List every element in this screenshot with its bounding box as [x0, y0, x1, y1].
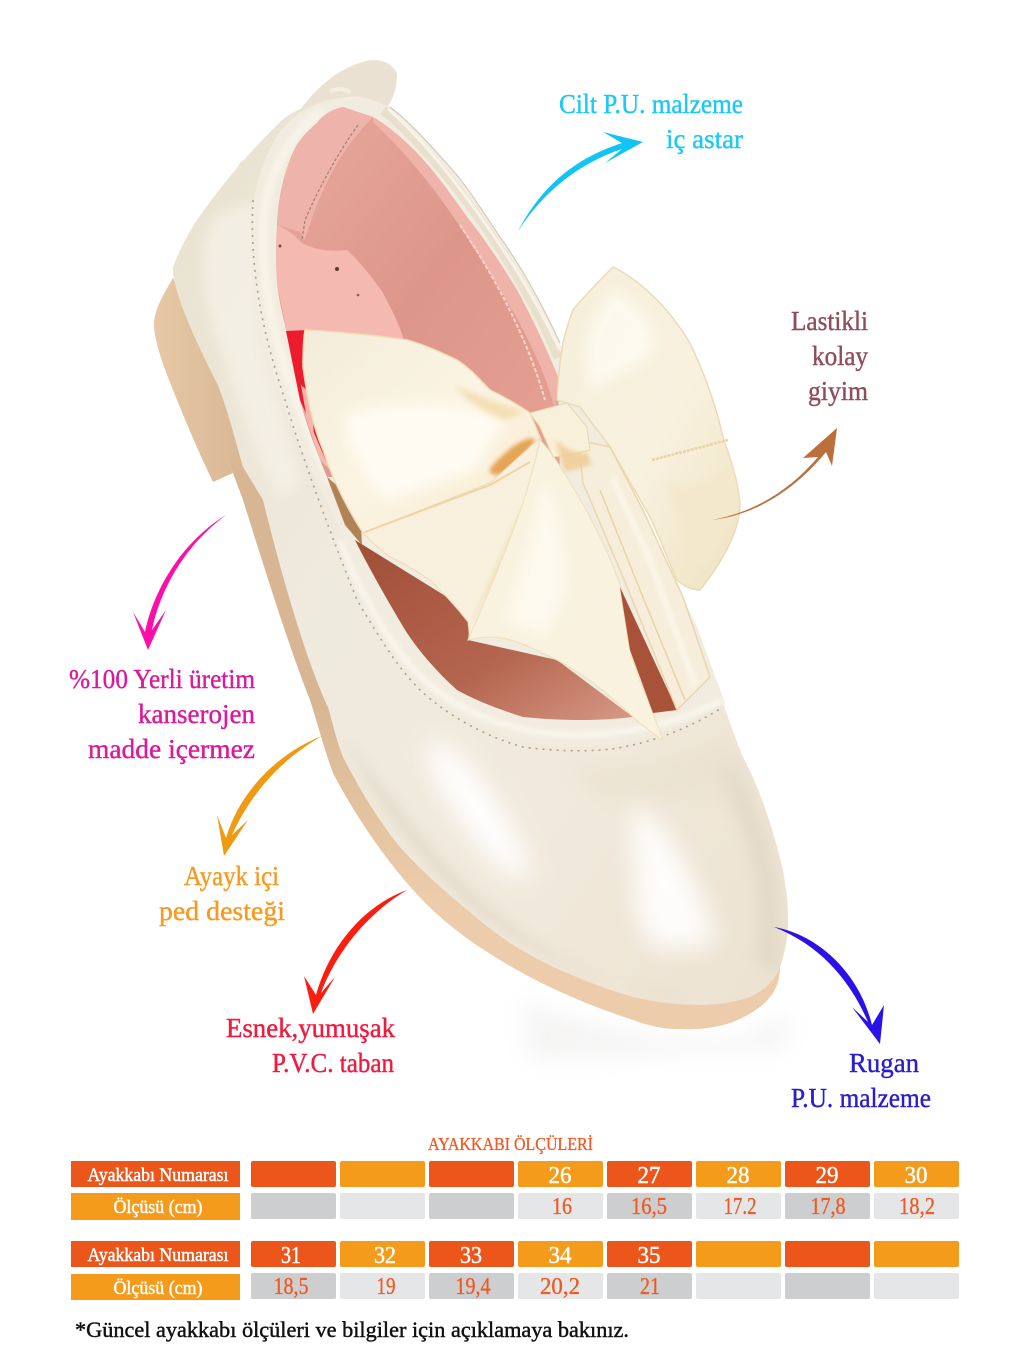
collar piping	[252, 97, 725, 746]
row labels: Ölçüsü (cm)	[114, 1197, 202, 1218]
shoe sizes: 26	[548, 1163, 572, 1189]
insole	[277, 225, 410, 480]
text: lining: Cilt P.U. malzeme	[559, 89, 743, 119]
arrow: orange to insole label	[217, 736, 322, 856]
red insole label	[286, 330, 345, 510]
shoe sizes: 32	[374, 1243, 396, 1269]
text: lining: iç astar	[666, 124, 743, 154]
lower opening	[355, 540, 633, 720]
foot lengths	[274, 1194, 935, 1300]
rim outer edge line	[390, 107, 560, 343]
bow knot	[530, 403, 590, 457]
arrow: magenta to origin label	[133, 515, 226, 650]
pearl highlights on toe	[203, 200, 781, 1003]
arrow: blue to patent label	[774, 927, 884, 1044]
text: elastic: giyim	[808, 376, 868, 406]
text: sole: P.V.C. taban	[272, 1048, 394, 1078]
foot lengths: 18,2	[899, 1194, 935, 1220]
foot lengths: 16,5	[631, 1194, 667, 1220]
text: patent: P.U. malzeme	[791, 1083, 931, 1113]
right lobe	[557, 267, 740, 590]
size table	[71, 1161, 959, 1300]
bow inner shadow	[490, 438, 536, 475]
foot lengths: 19	[376, 1274, 396, 1300]
text: origin: kanserojen	[138, 699, 255, 729]
heel tab	[228, 60, 397, 185]
foot lengths: 19,4	[456, 1274, 490, 1300]
text: insole	[159, 861, 285, 926]
row labels: Ayakkabı Numarası	[88, 1246, 228, 1266]
lining edge band	[373, 117, 558, 410]
foot lengths: 17.2	[724, 1194, 756, 1220]
hanging ribbon tail	[578, 440, 710, 710]
text: sole	[226, 1013, 395, 1078]
foot lengths: 18,5	[274, 1274, 308, 1300]
text: patent: Rugan	[849, 1048, 919, 1078]
text: origin: madde içermez	[88, 734, 255, 764]
footnote: *Güncel ayakkabı ölçüleri ve bilgiler için açıklamaya bakınız.	[75, 1317, 629, 1342]
shoe sizes: 31	[281, 1243, 301, 1269]
foot lengths: 16	[552, 1194, 572, 1220]
text: insole: Ayayk içi	[184, 861, 279, 891]
left lobe	[303, 330, 541, 533]
inner side panel	[278, 107, 373, 240]
arrow: cyan to lining label	[518, 132, 643, 231]
text: lining	[559, 89, 743, 154]
satin bow	[303, 267, 740, 740]
arrow: brown to elastic label	[712, 428, 837, 520]
floor shadow	[520, 1000, 790, 1060]
text: elastic	[791, 306, 868, 406]
shoe sizes: 35	[638, 1243, 660, 1269]
rim highlight	[383, 110, 558, 358]
table heading: AYAKKABI ÖLÇÜLERİ	[428, 1134, 593, 1154]
upper body	[173, 97, 788, 1005]
shoe sizes: 27	[638, 1163, 660, 1189]
text: elastic: Lastikli	[791, 306, 868, 336]
text: elastic: kolay	[812, 341, 868, 371]
text: sole: Esnek,yumuşak	[226, 1013, 395, 1043]
shoe sizes: 30	[904, 1163, 928, 1189]
foot lengths: 20,2	[540, 1274, 580, 1300]
text: insole: ped desteği	[159, 896, 285, 926]
shoe sizes	[281, 1163, 928, 1269]
cork insole edge	[327, 477, 362, 545]
shoe sizes: 29	[816, 1163, 838, 1189]
lower left fold	[363, 438, 540, 640]
interior lining	[276, 107, 560, 480]
row labels	[71, 1161, 240, 1300]
text: origin	[69, 664, 255, 764]
center drape	[468, 440, 663, 740]
shoe sizes: 28	[726, 1163, 750, 1189]
text: patent	[791, 1048, 931, 1113]
text: origin: %100 Yerli üretim	[69, 664, 255, 694]
arrow: red to sole label	[304, 890, 407, 1014]
sole and heel block	[154, 278, 780, 1029]
foot lengths: 17,8	[810, 1194, 846, 1220]
shoe sizes: 33	[460, 1243, 482, 1269]
shoe illustration	[154, 60, 788, 1029]
foot lengths: 21	[640, 1274, 660, 1300]
row labels: Ayakkabı Numarası	[88, 1166, 228, 1186]
shoe sizes: 34	[548, 1243, 572, 1269]
opening sliver right of drape	[620, 587, 677, 713]
cells	[251, 1161, 959, 1299]
row labels: Ölçüsü (cm)	[114, 1278, 202, 1299]
